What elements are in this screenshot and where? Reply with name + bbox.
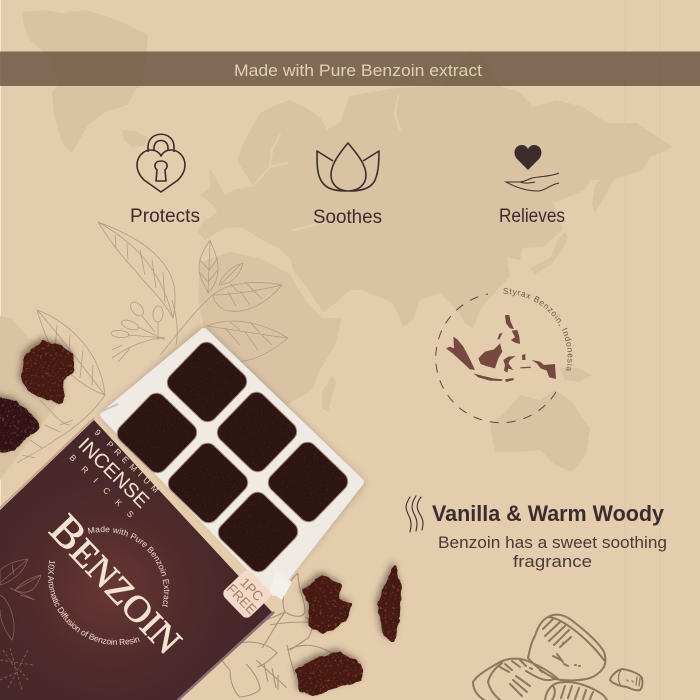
map: Indonesian islands	[446, 315, 556, 382]
botanical line drawing: rocks	[473, 615, 642, 700]
label: soothes: Soothes	[313, 207, 382, 228]
faint box botanicals	[0, 559, 41, 690]
map: Australia	[490, 390, 590, 472]
badge: 1pc free	[221, 568, 273, 620]
icon: heart in hand	[506, 145, 559, 191]
faint vertical guide lines	[625, 0, 660, 700]
botanical line drawing: upper	[17, 222, 288, 463]
map: New Guinea	[560, 368, 592, 382]
resin chunks	[0, 342, 400, 695]
icon: heart lock	[137, 134, 185, 192]
map: Britain	[200, 168, 227, 205]
label: bricks: BRICKS	[68, 452, 136, 520]
map: Iceland	[122, 130, 147, 147]
description line 2: fragrance	[513, 552, 592, 571]
label: incense: INCENSE	[73, 434, 153, 513]
brand name: benzoin: BENZOIN	[40, 505, 194, 663]
product package	[0, 324, 367, 700]
badge line 1: 1PC	[237, 575, 266, 604]
benefit: relieves	[499, 145, 565, 227]
description line 1: Benzoin has a sweet soothing	[438, 533, 667, 552]
map: Eurasia	[198, 52, 673, 328]
map: Japan	[530, 232, 568, 274]
incense box	[0, 417, 275, 700]
map: Madagascar	[322, 376, 336, 412]
map: South America	[0, 316, 70, 480]
botanical line drawing: lower flower	[220, 573, 335, 697]
label: protects: Protects	[130, 206, 200, 227]
indonesia locator	[435, 288, 574, 424]
map: inland seas	[253, 96, 400, 230]
icon: steam	[406, 496, 423, 532]
brick cells	[113, 338, 352, 576]
world map background	[0, 10, 673, 480]
map: Sakhalin and Kamchatka arm	[592, 172, 615, 213]
heading: vanilla and warm woody: Vanilla & Warm Woody	[432, 501, 665, 526]
package shadow	[100, 326, 365, 590]
benefit: soothes	[313, 143, 382, 228]
tray shading line	[100, 404, 118, 412]
blister tray	[100, 332, 360, 600]
fragrance callout	[406, 496, 667, 571]
map: Greenland	[22, 10, 148, 153]
circular text: aromatic diffusion: 10X Aromatic Diffusion of Benzoin Resin	[48, 560, 140, 645]
dashed circle	[436, 294, 556, 423]
banner text: Made with Pure Benzoin extract	[234, 61, 482, 80]
benefit: protects	[130, 134, 200, 227]
top banner	[0, 52, 700, 86]
box right edge	[177, 612, 274, 700]
label: relieves: Relieves	[499, 206, 565, 227]
icon: lotus	[317, 143, 379, 191]
circular text: made with pure benzoin extract: Made with Pure Benzoin Extract	[88, 526, 170, 608]
curved label: styrax benzoin: Styrax Benzoin, Indonesia	[503, 288, 574, 371]
map: Africa	[198, 252, 342, 420]
left edge highlight	[0, 0, 1, 700]
label: 9 premium: 9 PREMIUM	[93, 427, 161, 495]
badge line 2: FREE	[224, 581, 260, 617]
box edges	[0, 418, 94, 508]
